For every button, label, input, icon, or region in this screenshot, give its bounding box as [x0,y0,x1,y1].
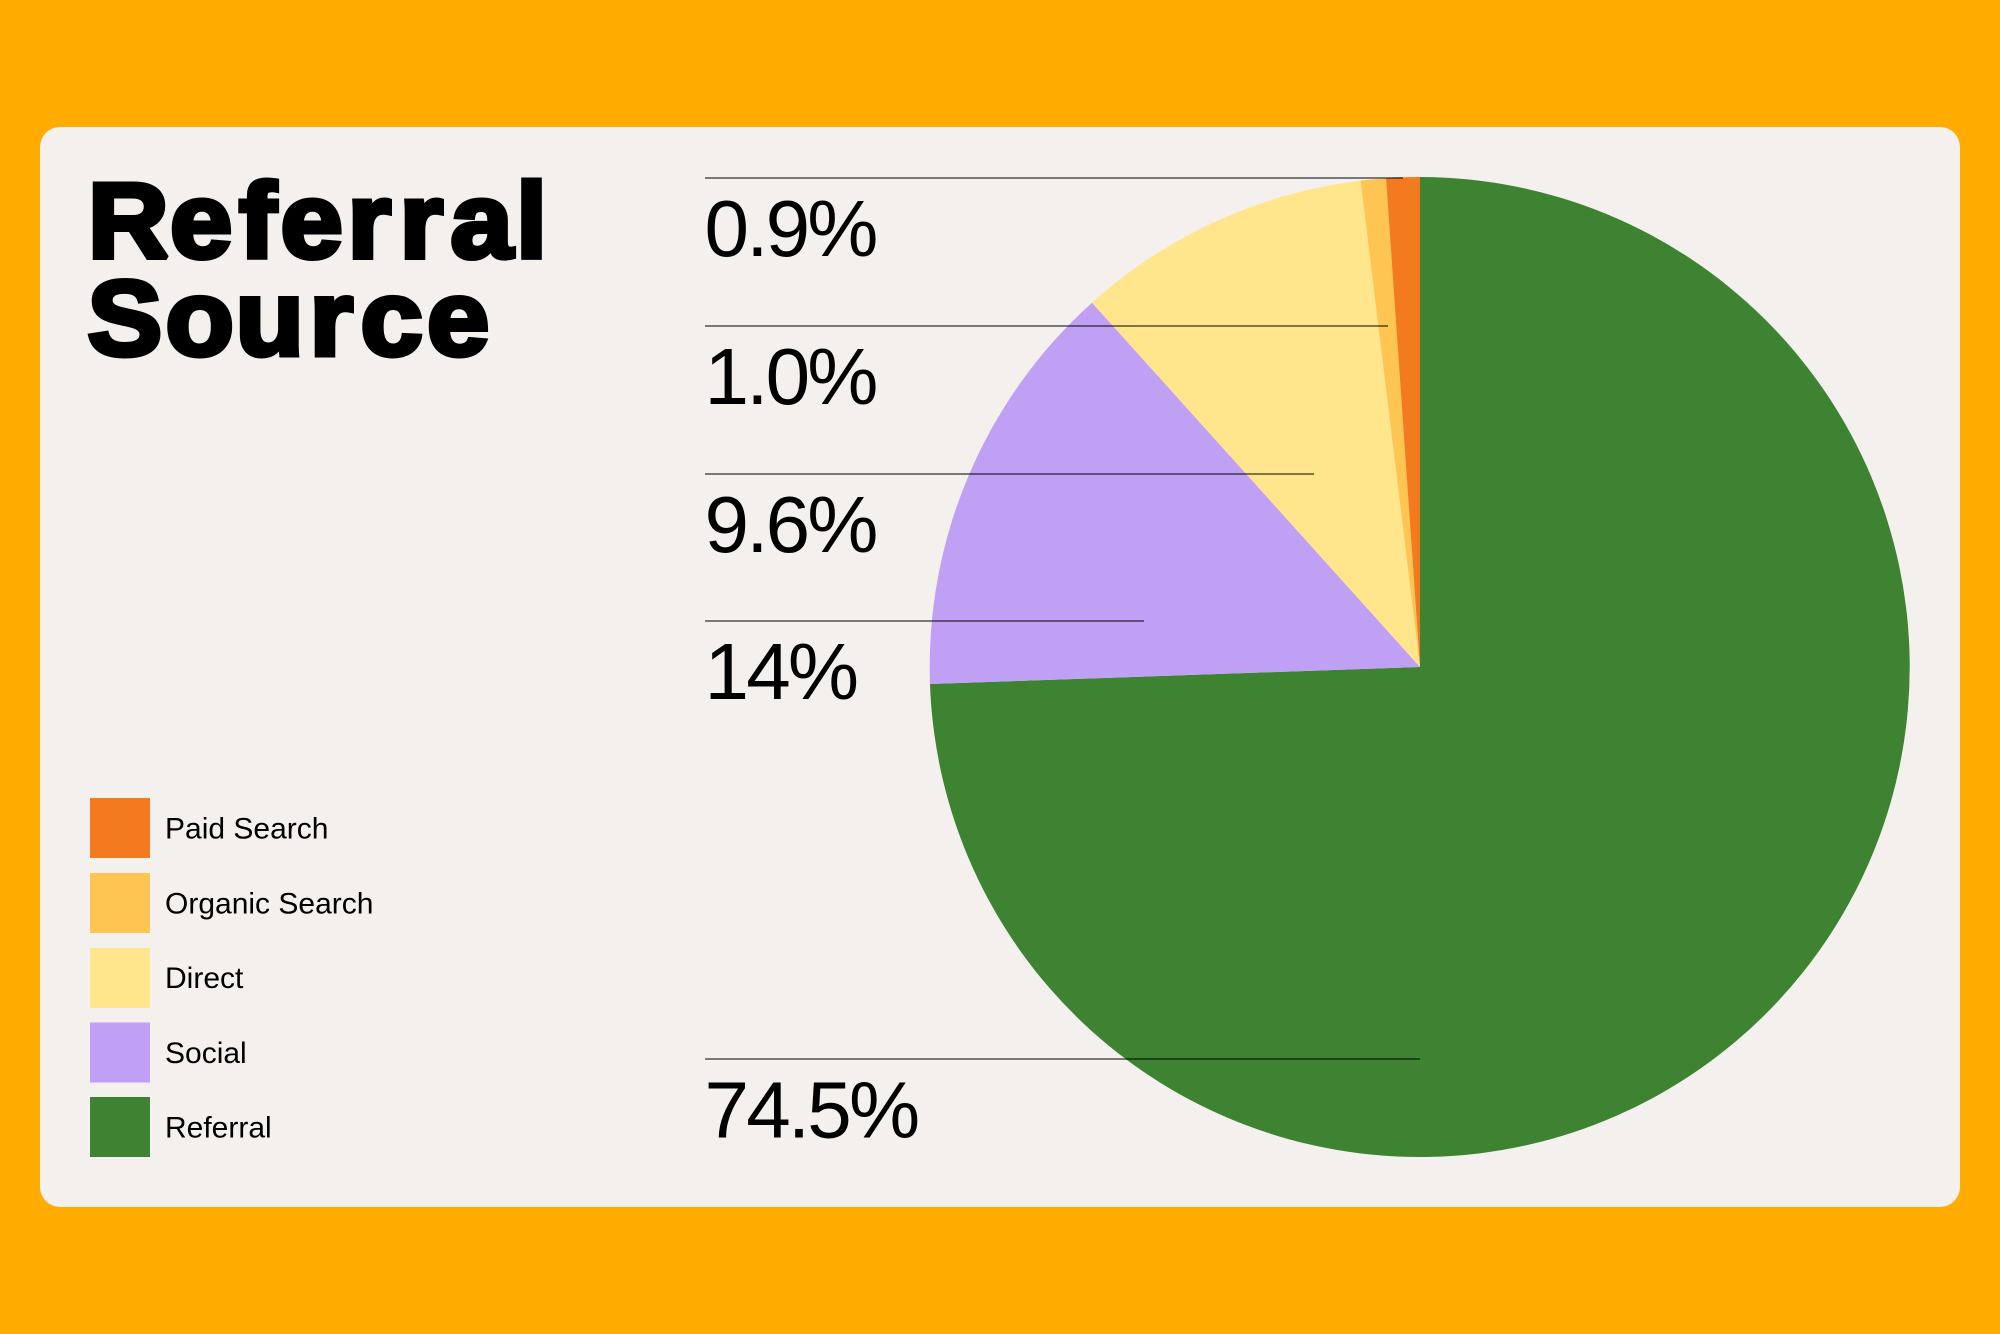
legend item: Organic Search [90,873,373,933]
legend item: Referral [90,1097,272,1157]
legend item: Social: Social [165,1037,247,1070]
legend item: Direct [90,948,244,1008]
legend item: Social [90,1022,247,1082]
legend item: Referral: Referral [165,1112,272,1144]
title: Source [88,259,489,378]
legend item: Direct: Direct [165,962,244,995]
callout: Paid Search value: 0.9% [704,184,876,273]
title: Referral [88,162,547,281]
slice: Social 14% [930,303,1420,684]
slice: Organic Search 1.0% [1361,178,1420,667]
callout: Referral value: 74.5% [704,1066,918,1154]
slice: Referral 74.5% [930,177,1910,1157]
legend [90,798,373,1157]
legend item: Paid Search: Paid Search [165,812,328,846]
pie chart [930,177,1910,1157]
callout: Organic Search value: 1.0% [704,332,876,421]
slice: Direct 9.6% [1092,181,1420,667]
callout: Direct value: 9.6% [704,480,876,569]
title [88,162,547,378]
slice: Paid Search 0.9% [1386,177,1420,667]
legend item: Organic Search: Organic Search [165,888,373,920]
legend item: Paid Search [90,798,328,858]
callout: Social value: 14% [704,627,857,716]
panel: main card [40,127,1960,1207]
